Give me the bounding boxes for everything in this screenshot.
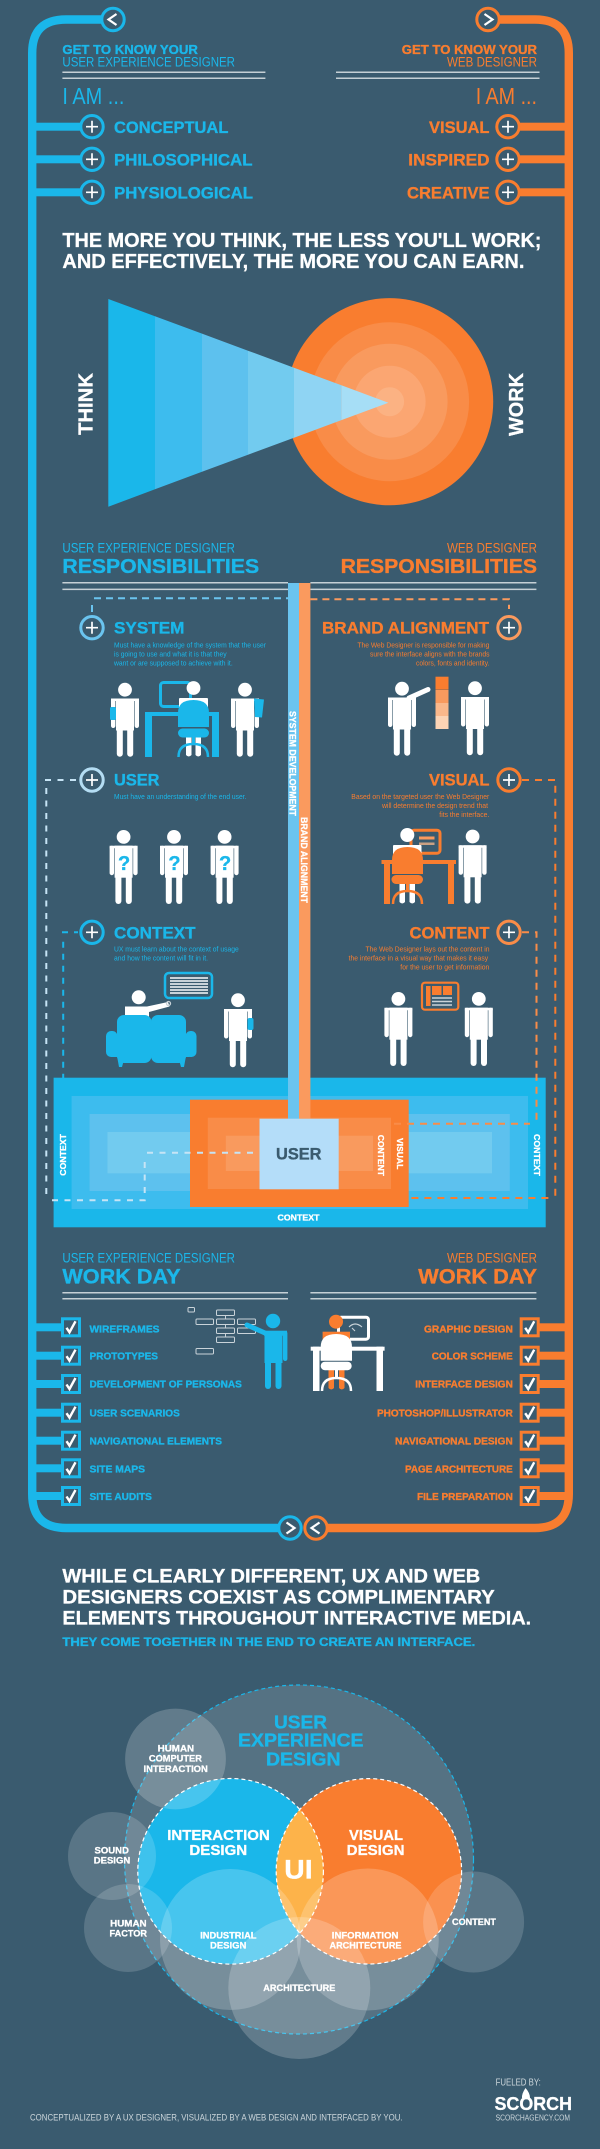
label: user experience design: DESIGN: [266, 1750, 341, 1770]
panel: content: the interface in a visual way that makes it easy: [349, 954, 488, 963]
heading: UX responsibilities: [62, 541, 259, 578]
logo: scorch: SCORCHAGENCY.COM: [496, 2114, 570, 2123]
panel: brand alignment: BRAND ALIGNMENT: [322, 619, 490, 638]
checklist: web work day: [377, 1319, 565, 1504]
panel: context: CONTEXT: [114, 923, 196, 942]
label: brand alignment: BRAND ALIGNMENT: [298, 817, 309, 903]
label: system development: SYSTEM DEVELOPMENT: [287, 711, 298, 816]
logo: scorch: [494, 2078, 572, 2123]
checklist: UX work day: DEVELOPMENT OF PERSONAS: [90, 1380, 242, 1391]
outer circles: [68, 1709, 524, 2059]
panel: brand alignment: The Web Designer is responsible for making: [357, 640, 489, 649]
panel: system: Must have a knowledge of the system that the user: [114, 640, 266, 649]
panel: user: [81, 769, 246, 801]
illustration: users with question marks: ?: [118, 853, 130, 875]
label: content: CONTENT: [376, 1135, 386, 1177]
heading: get to know web designer: GET TO KNOW YOUR: [402, 43, 537, 57]
heading: get to know UX designer: USER EXPERIENCE DESIGNER: [62, 55, 235, 70]
heading: UX responsibilities: USER EXPERIENCE DESIGNER: [62, 541, 235, 556]
checklist: UX work day: NAVIGATIONAL ELEMENTS: [90, 1437, 222, 1448]
label: human factor: FACTOR: [110, 1928, 147, 1939]
heading: web responsibilities: [341, 541, 537, 578]
list: web designer traits: VISUAL: [429, 118, 490, 137]
label: user experience design: [238, 1712, 364, 1770]
heading: get to know UX designer: GET TO KNOW YOUR: [62, 43, 198, 57]
label: visual design: DESIGN: [347, 1842, 404, 1859]
label: information architecture: INFORMATION: [332, 1930, 399, 1941]
panel: context: and how the content will fit in it.: [114, 954, 208, 963]
checklist: web work day: PAGE ARCHITECTURE: [405, 1464, 513, 1475]
dashed connector: user: [45, 780, 256, 1200]
text block: coexist statement: WHILE CLEARLY DIFFERENT, UX AND WEB: [62, 1566, 480, 1587]
label: information architecture: [330, 1930, 402, 1951]
panel: content: for the user to get information: [400, 963, 489, 972]
text block: coexist statement: ELEMENTS THROUGHOUT INTERACTIVE MEDIA.: [62, 1608, 531, 1629]
nested context rectangles: [54, 1078, 546, 1227]
panel: user: Must have an understanding of the end user.: [114, 792, 246, 801]
heading: get to know web designer: [402, 43, 537, 70]
panel: content: The Web Designer lays out the content in: [366, 945, 490, 954]
heading: web work day: WORK DAY: [418, 1265, 537, 1288]
label: sound design: DESIGN: [94, 1856, 130, 1867]
dashed connector: visual: [411, 780, 555, 1198]
panel: visual: [351, 769, 520, 819]
label: human computer interaction: INTERACTION: [144, 1764, 208, 1775]
heading: UX work day: [62, 1250, 235, 1288]
label: architecture: ARCHITECTURE: [263, 1983, 335, 1994]
checklist: UX work day: PROTOTYPES: [90, 1351, 158, 1362]
headline: think and work: [62, 230, 541, 273]
headline: think and work: AND EFFECTIVELY, THE MORE YOU CAN EARN.: [62, 251, 524, 273]
label: interaction design: [167, 1827, 270, 1859]
text: I am right: I AM ...: [476, 83, 537, 109]
panel: system: [81, 616, 266, 667]
label: human factor: HUMAN: [110, 1918, 147, 1929]
checklist: web work day: COLOR SCHEME: [432, 1351, 513, 1362]
heading: web work day: [418, 1250, 537, 1288]
dashed connector: system: [92, 598, 288, 612]
circle: user experience design: [124, 1685, 474, 2034]
panel: context: [81, 921, 239, 963]
illustration: web designer at desk: [311, 1315, 385, 1391]
text: I am left: I AM ...: [62, 83, 124, 109]
label: industrial design: INDUSTRIAL: [200, 1930, 257, 1941]
dashed connector: brand alignment: [310, 599, 509, 609]
illustration: users with question marks: ?: [168, 853, 181, 875]
label: context right: CONTEXT: [532, 1134, 542, 1177]
list: web designer traits: INSPIRED: [408, 151, 490, 170]
label: content: CONTENT: [452, 1917, 496, 1928]
dashed connector: context: [62, 932, 78, 1078]
icon: top left arrow: [102, 8, 124, 31]
logo: scorch: FUELED BY:: [496, 2078, 541, 2089]
orange frame line: [320, 20, 569, 1528]
label: visual design: [347, 1827, 404, 1859]
headline: think and work: THE MORE YOU THINK, THE LESS YOU'LL WORK;: [62, 230, 541, 252]
illustration: brand alignment people and swatches: [388, 677, 489, 756]
label: context left: CONTEXT: [58, 1133, 68, 1176]
checklist: web work day: GRAPHIC DESIGN: [424, 1324, 513, 1335]
label: user experience design: EXPERIENCE: [238, 1731, 364, 1751]
list: UX traits: PHILOSOPHICAL: [114, 151, 252, 170]
label: visual design: VISUAL: [349, 1827, 403, 1844]
checklist: web work day: NAVIGATIONAL DESIGN: [395, 1437, 513, 1448]
dashed connector: content: [394, 932, 536, 1124]
list: web designer traits: [407, 116, 565, 204]
panel: brand alignment: sure the interface aligns with the brands: [370, 649, 490, 658]
checklist: UX work day: SITE MAPS: [90, 1464, 145, 1475]
label: interaction design: INTERACTION: [167, 1827, 270, 1844]
label: context bottom: CONTEXT: [278, 1213, 320, 1223]
checklist: UX work day: WIREFRAMES: [90, 1324, 160, 1335]
label: human computer interaction: HUMAN: [158, 1744, 194, 1755]
label: user experience design: USER: [274, 1712, 327, 1732]
label: human computer interaction: [144, 1744, 208, 1775]
illustration: users with question marks: ?: [219, 853, 231, 875]
UI intersection: [276, 1810, 324, 1933]
checklist: UX work day: USER SCENARIOS: [90, 1408, 180, 1419]
label: industrial design: [200, 1930, 257, 1951]
heading: web responsibilities: WEB DESIGNER: [447, 541, 537, 556]
heading: get to know UX designer: [62, 43, 235, 70]
label: sound design: SOUND: [94, 1846, 129, 1857]
checklist: UX work day: SITE AUDITS: [90, 1492, 152, 1503]
center column: brand alignment: [299, 583, 310, 1119]
panel: system: want or are supposed to achieve with it.: [113, 658, 233, 667]
icon: top right arrow: [477, 8, 499, 31]
illustration: visual designer at desk: [382, 828, 487, 904]
panel: visual: Based on the targeted user the Web Designer: [351, 792, 490, 801]
chart: think funnel: [108, 299, 388, 507]
checklist: web work day: FILE PREPARATION: [417, 1492, 513, 1503]
heading: UX work day: WORK DAY: [62, 1265, 181, 1288]
footer credit: CONCEPTUALIZED BY A UX DESIGNER, VISUALIZED BY A WEB DESIGN AND INTERFACED BY YOU.: [30, 2113, 403, 2124]
panel: user: USER: [114, 771, 160, 790]
nested visual and content rectangles: [190, 1100, 409, 1207]
checklist: web work day: PHOTOSHOP/ILLUSTRATOR: [377, 1408, 514, 1419]
checklist: UX work day: [36, 1319, 242, 1504]
panel: visual: fits the interface.: [439, 810, 489, 819]
illustration: system people and desk: [110, 681, 264, 757]
heading: web responsibilities: RESPONSIBILITIES: [341, 556, 537, 578]
label: visual: VISUAL: [395, 1138, 405, 1169]
user box: [260, 1119, 339, 1189]
circle: interaction design: [138, 1778, 323, 1964]
text block: coexist statement: DESIGNERS COEXIST AS COMPLIMENTARY: [62, 1587, 495, 1608]
icon: bottom blue arrow: [279, 1517, 301, 1539]
panel: brand alignment: colors, fonts and identity.: [416, 658, 490, 667]
logo: scorch: SCORCH: [494, 2094, 572, 2114]
dashed outlines: [138, 1778, 462, 1964]
icon: bottom orange arrow: [305, 1517, 327, 1539]
illustration: couch and television: [106, 973, 254, 1067]
list: UX traits: CONCEPTUAL: [114, 118, 228, 137]
panel: context: UX must learn about the context of usage: [114, 945, 239, 954]
list: web designer traits: CREATIVE: [407, 184, 490, 203]
heading: UX responsibilities: RESPONSIBILITIES: [62, 556, 259, 578]
list: UX traits: [36, 116, 253, 204]
heading: get to know web designer: WEB DESIGNER: [447, 55, 537, 70]
label: information architecture: ARCHITECTURE: [330, 1940, 402, 1951]
label: work: WORK: [506, 372, 528, 436]
user box: USER: [276, 1144, 322, 1163]
panel: visual: VISUAL: [429, 771, 490, 790]
panel: content: CONTENT: [410, 923, 490, 942]
illustration: content people and document: [384, 983, 493, 1066]
heading: web work day: WEB DESIGNER: [447, 1250, 537, 1265]
center column: system development: [288, 583, 299, 1119]
panel: visual: will determine the design trend that: [381, 801, 489, 810]
label: human computer interaction: COMPUTER: [149, 1754, 202, 1765]
text block: coexist statement: [62, 1566, 531, 1649]
venn diagram: [68, 1685, 524, 2059]
circle: visual design: [276, 1779, 462, 1964]
label: human factor: [110, 1918, 147, 1939]
label: think: THINK: [76, 372, 98, 435]
illustration: users with question marks: [110, 830, 239, 904]
panel: brand alignment: [322, 616, 520, 667]
panel: content: [349, 921, 520, 972]
label: industrial design: DESIGN: [210, 1940, 247, 1951]
list: UX traits: PHYSIOLOGICAL: [114, 184, 253, 203]
panel: system: SYSTEM: [114, 619, 184, 638]
label: interaction design: DESIGN: [189, 1842, 247, 1859]
chart: work concentric circles: [286, 298, 493, 505]
text block: coexist statement: THEY COME TOGETHER IN THE END TO CREATE AN INTERFACE.: [62, 1635, 475, 1649]
label: sound design: [94, 1846, 130, 1867]
illustration: UX designer at wireframe wall: [188, 1308, 287, 1389]
blue frame line: [32, 20, 285, 1528]
panel: system: is going to use and what it is that they: [114, 649, 227, 658]
checklist: web work day: INTERFACE DESIGN: [415, 1380, 513, 1391]
heading: UX work day: USER EXPERIENCE DESIGNER: [62, 1250, 235, 1265]
label: UI: UI: [284, 1854, 313, 1884]
